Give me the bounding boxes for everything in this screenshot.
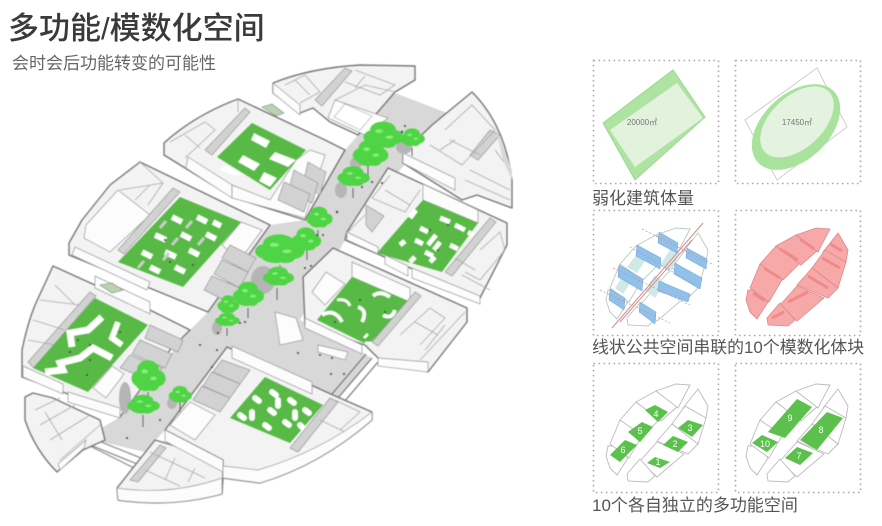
tree 12 [233,282,264,306]
block: west with green hall 2 [69,162,270,312]
small green roof on north-west gap [262,104,284,116]
block: south-west corner wing [25,393,105,472]
people [69,125,449,439]
tree shadows [119,140,412,414]
panel: multifunctional spaces 7-10: 7 [796,451,802,461]
tree trunks [143,148,412,427]
caption 3: 10个各自独立的多功能空间 [592,496,798,515]
block: east with green hall 4 [275,248,467,372]
tree 10 [127,395,160,414]
panel: multifunctional spaces 7-10 [736,364,860,492]
tree 7 [255,234,305,263]
panel: multifunctional spaces 1-6: 4 [653,409,659,419]
subtitle: 会时会后功能转变的可能性 [12,54,216,73]
block: north-west with green hall 1 [164,99,345,220]
tree 5 [306,207,333,228]
caption 1: 弱化建筑体量 [592,189,694,208]
panel: pink modular volumes [736,210,860,336]
small green roof on south-west gap [100,283,123,293]
panel: multifunctional spaces 1-6: 3 [687,423,693,433]
tree 14 [215,313,240,326]
tree 8 [263,267,294,286]
block: south with green hall 6 [165,346,372,483]
tree 1 [364,122,404,148]
panel: elliptical volume [735,60,860,187]
block: south-west with green hall 5 [22,266,190,418]
block: south wing [117,440,223,503]
panel: multifunctional spaces 7-10: 8 [818,425,824,435]
panel: multifunctional spaces 7-10: 10 [760,439,770,449]
panel: multifunctional spaces 7-10: 9 [787,413,793,423]
tree 6 [292,227,321,250]
panel: rectangular volume [594,60,718,184]
caption 2: 线状公共空间串联的10个模数化体块 [592,338,864,357]
tree 3 [353,140,388,166]
central plaza floor [85,93,447,452]
tree 9 [132,360,166,391]
panel: multifunctional spaces 1-6: 1 [655,457,661,467]
block: north wing [273,65,415,135]
tree 13 [218,295,239,313]
stair strip south-west [83,436,146,470]
panel: multifunctional spaces 1-6: 5 [637,426,643,436]
axonometric plan [22,65,512,503]
stair strip south-east [332,354,378,402]
panel: elliptical volume: 17450㎡ [782,118,812,127]
tree 4 [337,166,370,186]
panel: rectangular volume: 20000㎡ [627,118,657,127]
block: north-east corner wing [403,92,512,208]
panel: multifunctional spaces 1-6: 6 [620,445,626,455]
title: 多功能/模数化空间 [8,11,265,46]
panel: multifunctional spaces 1-6: 2 [672,439,678,449]
tree 2 [400,128,425,146]
panel: multifunctional spaces 1-6 [594,364,718,492]
panel: linear public space diagram [594,210,718,336]
block: north-east with green hall 3 [345,168,507,304]
tree 11 [169,386,192,402]
